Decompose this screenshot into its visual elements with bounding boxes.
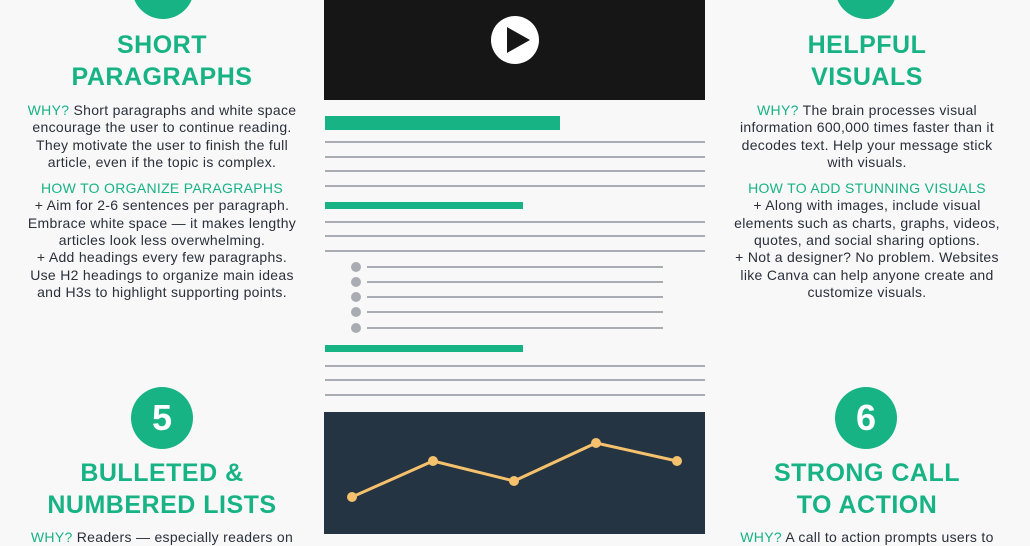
heading: call to action: TO ACTION <box>797 491 937 519</box>
heading: bulleted lists: NUMBERED LISTS <box>47 491 277 519</box>
text block: how to: quotes, and social sharing options. <box>754 232 980 248</box>
text block: how to <box>28 180 296 300</box>
heading: short paragraphs <box>72 31 252 91</box>
heading: bulleted lists <box>47 459 277 519</box>
icon: circle number 5 <box>131 387 193 449</box>
text block: why: information 600,000 times faster than it <box>740 119 994 135</box>
heading: call to action: STRONG CALL <box>774 459 960 487</box>
heading: call to action <box>774 459 960 519</box>
text block: how to: and H3s to highlight supporting points. <box>37 284 287 300</box>
text block: how to: Use H2 headings to organize main ideas <box>30 267 294 283</box>
text block: how to: Embrace white space — it makes lengthy <box>28 215 296 231</box>
text block: how to: + Aim for 2-6 sentences per paragraph. <box>35 197 289 213</box>
panel: call to action <box>740 459 994 545</box>
heading: helpful visuals: VISUALS <box>811 63 923 91</box>
heading: short paragraphs: PARAGRAPHS <box>72 63 252 91</box>
text block: how to: HOW TO ORGANIZE PARAGRAPHS <box>41 180 283 196</box>
article lines <box>325 116 705 396</box>
heading: short paragraphs: SHORT <box>117 31 207 59</box>
icon: play button <box>491 16 539 64</box>
text block: why: article, even if the topic is complex. <box>48 154 276 170</box>
text block: how to <box>734 180 1000 300</box>
panel: bulleted lists <box>31 459 293 545</box>
text block: how to: customize visuals. <box>808 284 926 300</box>
text block: how to: + Add headings every few paragraphs. <box>37 249 287 265</box>
text block: why <box>740 102 994 170</box>
panel: helpful visuals <box>734 31 1000 300</box>
text block: why: WHY? The brain processes visual <box>757 102 977 118</box>
line chart <box>324 412 705 534</box>
text block: how to: + Not a designer? No problem. Websites <box>735 249 999 265</box>
icon: circle number 3 <box>132 0 194 19</box>
text block: why: WHY? Short paragraphs and white space <box>28 102 296 118</box>
icon: circle number 6: 6 <box>856 397 876 438</box>
icon: circle number 4 <box>835 0 897 19</box>
text block: why: They motivate the user to finish the full <box>36 137 288 153</box>
text block: how to: elements such as charts, graphs, videos, <box>734 215 1000 231</box>
text block: why: WHY? Readers — especially readers on <box>31 529 293 545</box>
text block: why: encourage the user to continue reading. <box>32 119 292 135</box>
text block: how to: + Along with images, include visual <box>753 197 981 213</box>
text block: how to: articles look less overwhelming. <box>59 232 265 248</box>
panel: short paragraphs <box>28 31 296 300</box>
icon: circle number 5: 5 <box>152 397 172 438</box>
heading: helpful visuals: HELPFUL <box>808 31 926 59</box>
text block: why: decodes text. Help your message stick <box>742 137 992 153</box>
video player <box>324 0 705 100</box>
heading: helpful visuals <box>808 31 926 91</box>
icon: circle number 6 <box>835 387 897 449</box>
text block: why <box>28 102 296 170</box>
heading: bulleted lists: BULLETED & <box>80 459 244 487</box>
text block: why: with visuals. <box>827 154 907 170</box>
text block: how to: HOW TO ADD STUNNING VISUALS <box>748 180 986 196</box>
text block: why: WHY? A call to action prompts users to <box>740 529 994 545</box>
text block: how to: like Canva can help anyone create and <box>740 267 994 283</box>
